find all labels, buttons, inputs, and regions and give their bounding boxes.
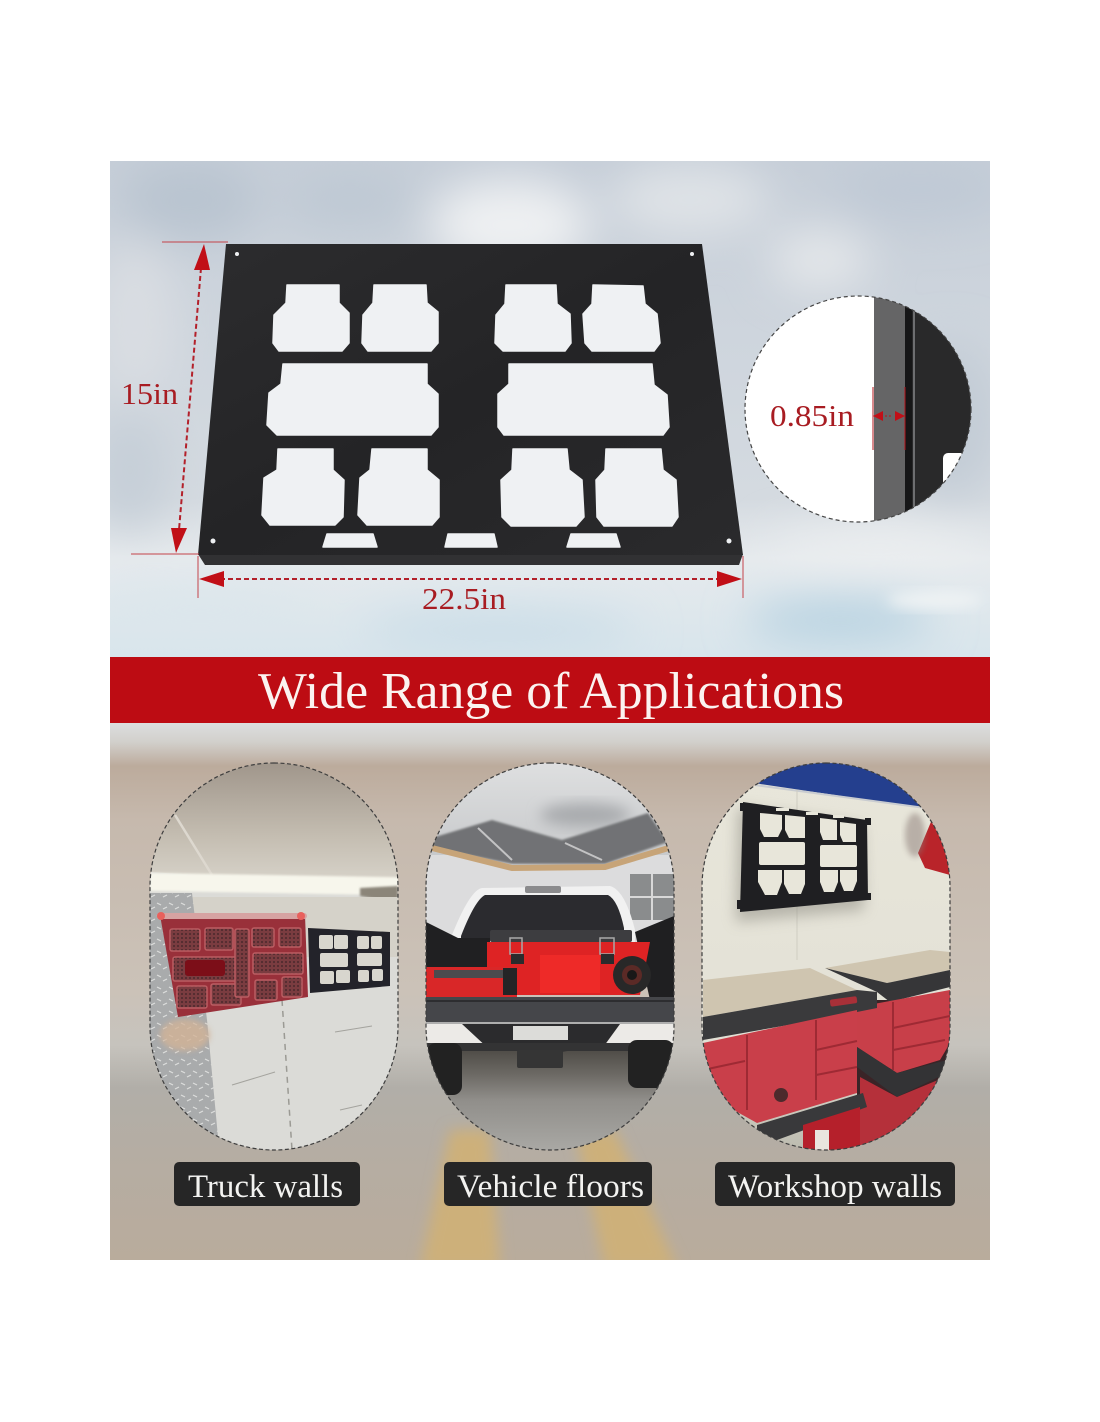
blue ceiling stripe	[758, 763, 922, 808]
tailgate	[426, 997, 674, 1023]
caption: Vehicle floors: Vehicle floors	[457, 1169, 644, 1205]
plate cutouts	[262, 285, 678, 547]
red tool on wall	[918, 822, 950, 875]
diamond plate	[150, 893, 218, 1150]
house roof	[432, 813, 668, 864]
background: road panel	[110, 723, 990, 1270]
plate body	[198, 244, 743, 555]
detail callout: plate thickness	[745, 290, 975, 530]
banner heading: Wide Range of Applications	[258, 663, 844, 720]
right red box	[857, 990, 950, 1073]
tow hitch	[517, 1050, 563, 1068]
big red box	[487, 942, 650, 995]
wall plate shadow	[736, 808, 864, 922]
right work top	[825, 950, 950, 983]
lower shadow behind boxes	[857, 1000, 950, 1150]
bumper	[426, 1024, 674, 1044]
caption: Truck walls	[174, 1162, 360, 1206]
bed sides	[426, 922, 490, 967]
left work top	[703, 968, 857, 1017]
banner	[110, 657, 990, 723]
small red case	[426, 967, 517, 998]
left red box	[703, 1010, 857, 1123]
photo: truck wall	[150, 763, 402, 1150]
ceiling light	[150, 873, 402, 895]
infographic canvas	[110, 161, 990, 1260]
photo: pickup truck bed	[426, 763, 674, 1150]
wall plate	[737, 802, 871, 912]
spare wheel	[613, 956, 651, 994]
roof trim	[432, 847, 672, 868]
photo: workshop wall	[702, 763, 950, 1150]
small plate on wall	[308, 928, 390, 993]
lower dark rim	[757, 1093, 867, 1145]
rear wheels	[427, 1043, 462, 1095]
metal mounting plate with dimensions	[198, 244, 743, 565]
house window	[630, 874, 674, 920]
mounting holes	[210, 252, 732, 544]
truck cab	[452, 886, 635, 945]
dimension: height 15in	[121, 242, 228, 554]
dimension: width 22.5in	[198, 556, 743, 616]
label 0.85in: 0.85in	[770, 398, 855, 433]
caption: Truck walls: Truck walls	[188, 1169, 343, 1205]
gravel	[426, 1050, 674, 1150]
plate front fold	[198, 554, 743, 565]
label 15in: 15in	[121, 376, 179, 411]
caption: Workshop walls: Workshop walls	[728, 1169, 942, 1205]
wall seams and marks	[282, 1000, 292, 1150]
red organizer	[157, 912, 308, 1017]
background: sky panel	[90, 160, 1010, 657]
label 22.5in: 22.5in	[422, 581, 507, 616]
